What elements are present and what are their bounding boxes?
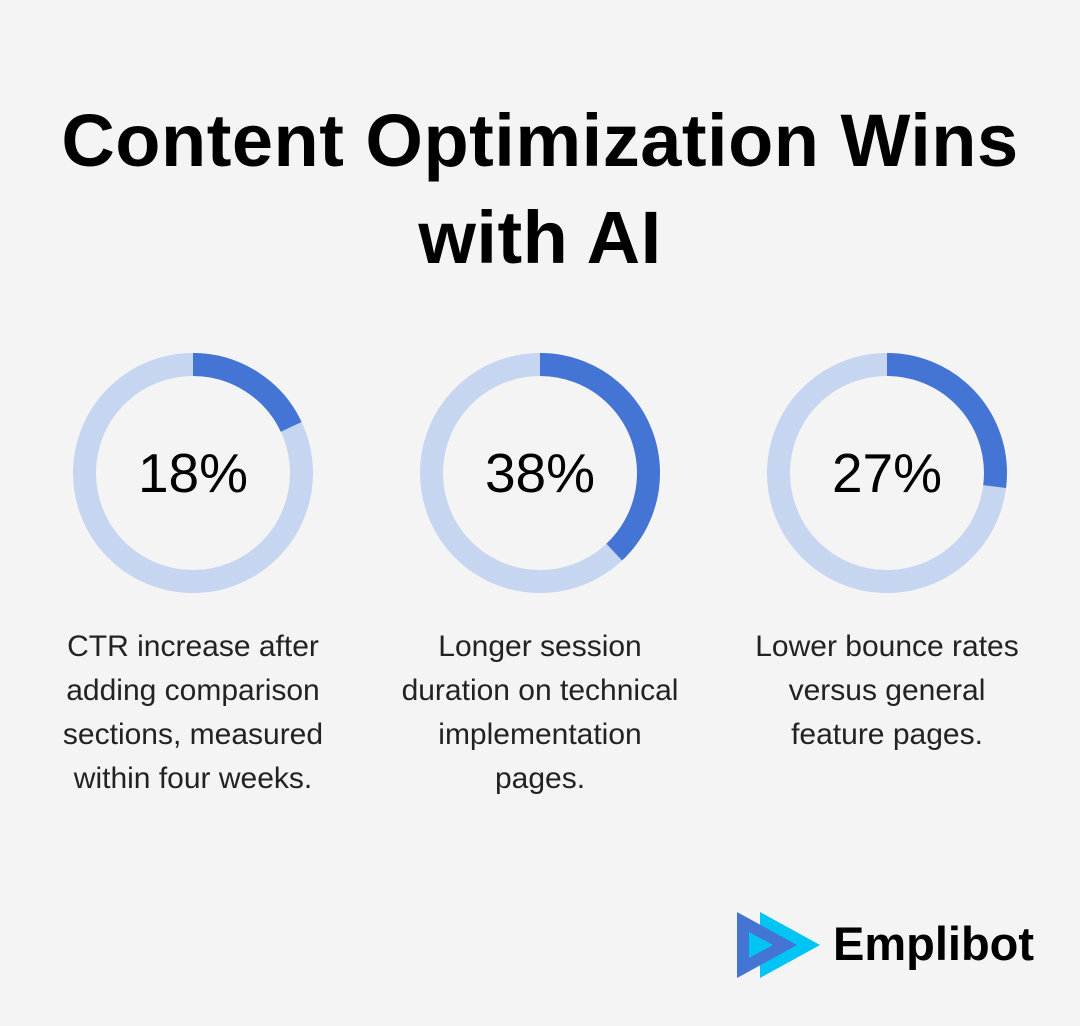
title: [61, 99, 1019, 279]
logo: Emplibot: [833, 917, 1034, 970]
caption: 27%: [755, 630, 1019, 751]
donut: 38%: 38%: [485, 442, 595, 504]
caption: 18%: within four weeks.: [74, 762, 312, 795]
donut: 27%: 27%: [832, 442, 942, 504]
title: with AI: [418, 196, 662, 279]
donut: 18%: 18%: [138, 442, 248, 504]
donut: 38%: [420, 353, 660, 593]
caption: 38%: [402, 630, 678, 795]
donut: 27%: [767, 353, 1007, 593]
logo: [737, 912, 1034, 978]
caption: 18%: [63, 630, 323, 795]
donut: 18%: [73, 353, 313, 593]
caption: 38%: Longer session: [438, 630, 642, 663]
caption: 27%: feature pages.: [791, 718, 983, 751]
caption: 18%: sections, measured: [63, 718, 323, 751]
caption: 38%: duration on technical: [402, 674, 678, 707]
caption: 18%: CTR increase after: [67, 630, 319, 663]
caption: 38%: implementation: [438, 718, 642, 751]
caption: 27%: Lower bounce rates: [755, 630, 1019, 663]
caption: 18%: adding comparison: [66, 674, 320, 707]
title: Content Optimization Wins: [61, 99, 1019, 182]
caption: 38%: pages.: [495, 762, 585, 795]
caption: 27%: versus general: [789, 674, 985, 707]
